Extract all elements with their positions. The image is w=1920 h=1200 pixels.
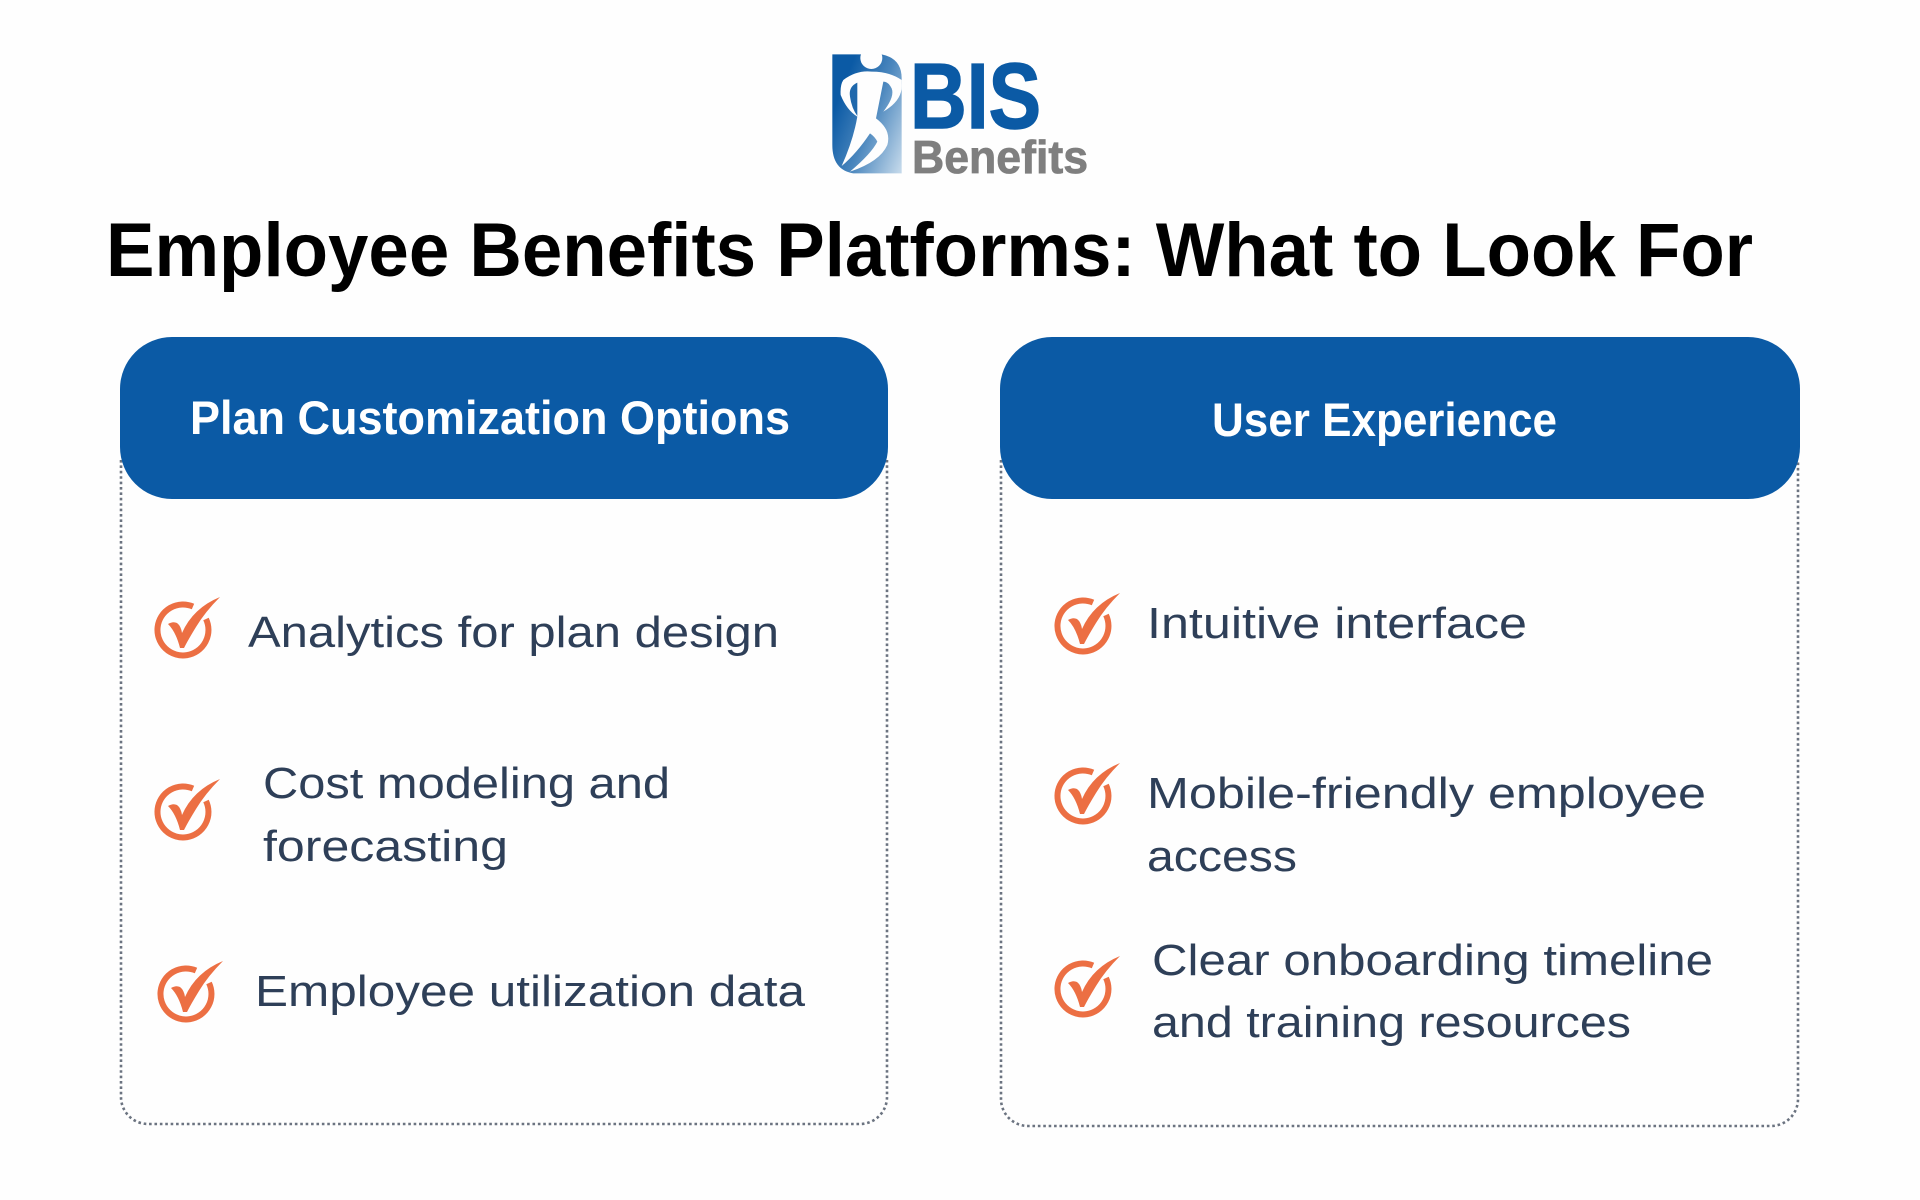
logo word: Benefits: Benefits [912,131,1088,183]
text: mobile-friendly employee access: Mobile-friendly employee [1147,769,1706,818]
panel: plan customization options [120,337,888,1124]
text: clear onboarding timeline and training resources: and training resources [1152,998,1631,1047]
logo: BIS Benefits [832,44,1088,183]
panel header: blue bar [120,337,888,499]
panel: user experience [1000,337,1800,1126]
text: analytics for plan design: Analytics for plan design [248,608,779,657]
text: cost modeling and forecasting: forecasting [263,822,508,871]
text: clear onboarding timeline and training resources [1152,936,1713,1047]
heading: User Experience: User Experience [1212,393,1557,446]
list item: cost modeling [157,759,670,871]
icon: running figure shield [832,47,902,173]
logo word: BIS: BIS [910,44,1041,148]
list item: intuitive interface [1057,593,1527,651]
heading: Plan Customization Options: Plan Customization Options [190,391,790,444]
list item: mobile friendly [1057,763,1706,881]
icon: check mark [1057,763,1120,821]
text: clear onboarding timeline and training resources: Clear onboarding timeline [1152,936,1713,985]
list item: clear onboarding [1057,936,1713,1047]
title: Employee Benefits Platforms: What to Look For [106,208,1753,293]
list item: employee utilization [160,961,806,1019]
text: intuitive interface: Intuitive interface [1147,599,1527,648]
text: mobile-friendly employee access [1147,769,1706,881]
icon: check mark [160,961,223,1019]
icon: check mark [157,779,220,837]
text: cost modeling and forecasting: Cost modeling and [263,759,670,808]
text: employee utilization data: Employee utilization data [255,967,806,1016]
text: cost modeling and forecasting [263,759,670,871]
panel border: dotted outline [121,460,887,1124]
list item: analytics [157,597,779,657]
panel header: blue bar [1000,337,1800,499]
text: mobile-friendly employee access: access [1147,832,1297,881]
icon: check mark [157,597,220,655]
icon: check mark [1057,956,1120,1014]
panel border: dotted outline [1001,460,1798,1126]
icon: check mark [1057,593,1120,651]
